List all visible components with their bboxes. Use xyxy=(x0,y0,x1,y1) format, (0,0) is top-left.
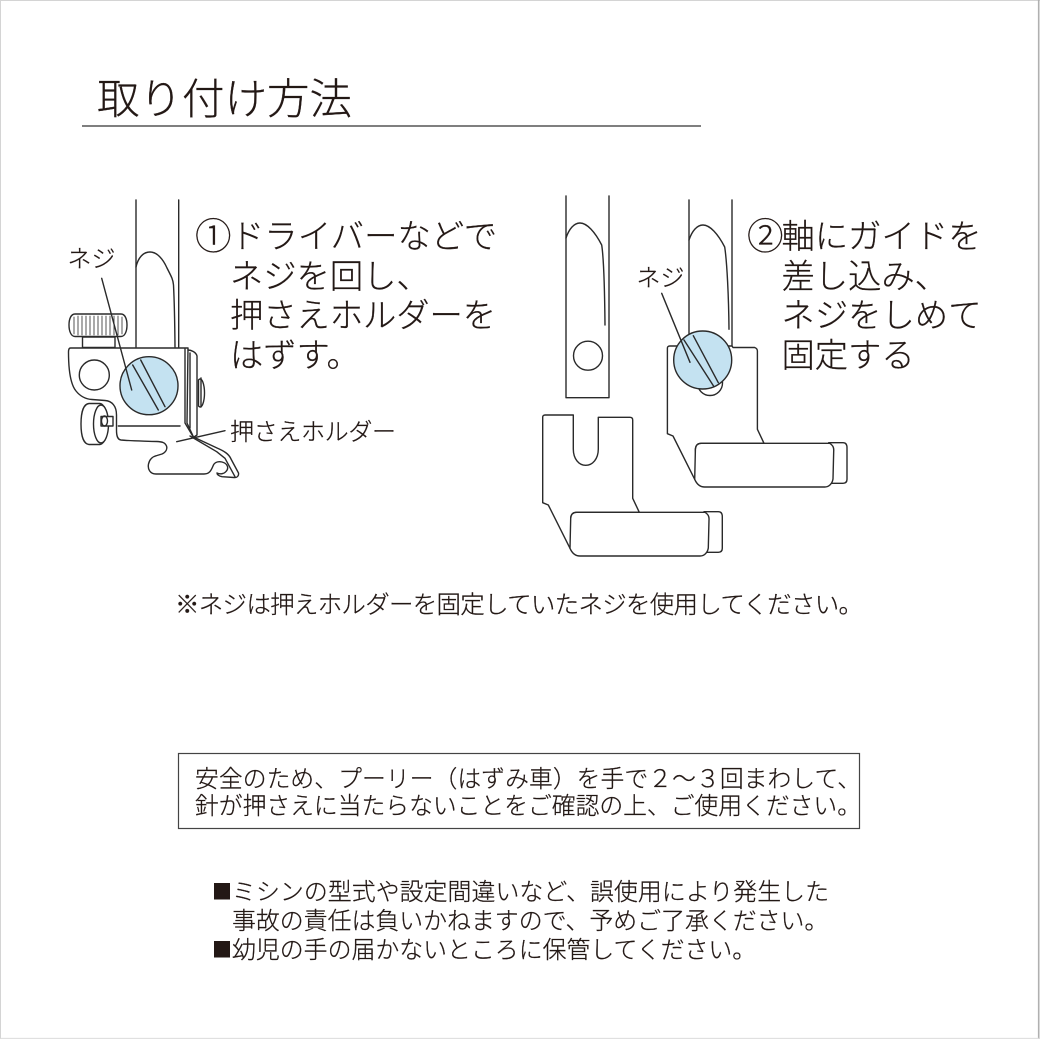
illustration: presser holder with screw xyxy=(68,200,239,478)
illustration: shaft and guide separated xyxy=(543,196,722,556)
shaft xyxy=(566,196,609,398)
illustration: guide attached to shaft xyxy=(662,200,847,487)
step 1 text: ① xyxy=(195,216,232,257)
label: screw 1: ネジ xyxy=(68,246,116,273)
screw hole xyxy=(698,370,722,396)
leader line: screw xyxy=(662,293,690,362)
step 2 text: ② xyxy=(747,216,784,257)
step 1 text: はずす。 xyxy=(230,338,360,375)
hole xyxy=(79,360,109,390)
step 2 text: ネジをしめて xyxy=(782,298,982,335)
leader line: holder xyxy=(177,431,225,442)
right side plate xyxy=(185,349,197,437)
step 1 text: 押さえホルダーを xyxy=(230,298,496,335)
icon: highlighted screw xyxy=(674,331,732,389)
warnings xyxy=(214,879,829,964)
step 2 text xyxy=(747,216,982,375)
warnings: ミシンの型式や設定間違いなど、誤使用により発生した xyxy=(232,879,829,906)
icon: thumb screw knob xyxy=(69,314,127,348)
step 2 text: 差し込み、 xyxy=(782,259,948,296)
caution box xyxy=(178,754,861,828)
step 2 text: 軸にガイドを xyxy=(782,219,982,256)
title: 取り付け方法 xyxy=(97,77,352,124)
guide xyxy=(667,346,847,487)
guide xyxy=(543,415,722,556)
step 2 text: 固定する xyxy=(782,338,915,375)
step 1 text: ネジを回し、 xyxy=(230,259,430,296)
warnings: 事故の責任は負いかねますので、予めご了承ください。 xyxy=(232,908,828,935)
warnings: 幼児の手の届かないところに保管してください。 xyxy=(232,937,756,964)
foot plate xyxy=(68,348,239,478)
icon: highlighted screw xyxy=(120,357,178,415)
step 1 text: ドライバーなどで xyxy=(231,219,497,256)
caution box: 針が押さえに当たらないことをご確認の上、ご使用ください。 xyxy=(195,793,861,820)
leader line: screw xyxy=(102,278,132,390)
note: ※ネジは押えホルダーを固定していたネジを使用してください。 xyxy=(175,591,863,619)
caution box: 安全のため、プーリー（はずみ車）を手で２～３回まわして、 xyxy=(195,766,861,793)
label: screw 2: ネジ xyxy=(636,265,684,292)
step 1 text xyxy=(195,216,497,375)
small roller xyxy=(81,404,113,444)
label: presser holder: 押さえホルダー xyxy=(230,419,396,446)
